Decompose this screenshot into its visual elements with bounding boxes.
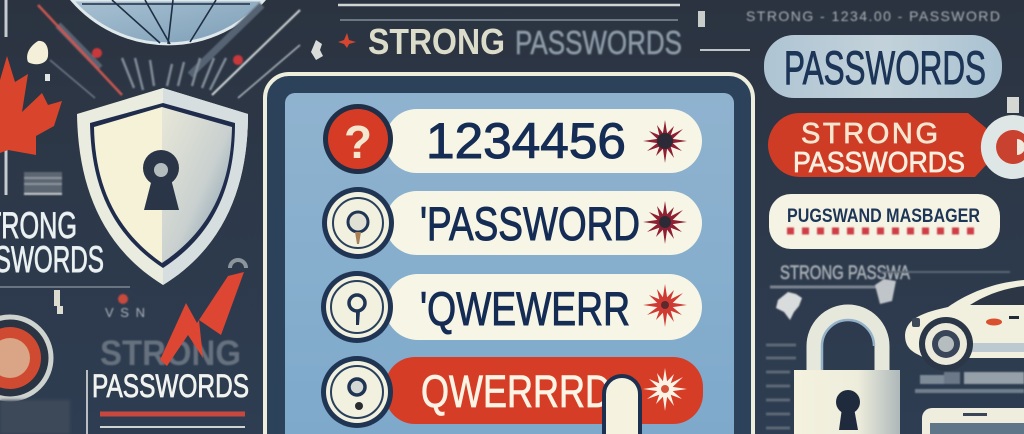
row 1: 123456: 1234456 (426, 113, 626, 169)
red badge bottom left (0, 287, 130, 434)
strong passwords red pill: STRONG (801, 118, 938, 150)
maple leaf (0, 0, 62, 195)
strong passwords red pill: PASSWORDS (793, 147, 965, 179)
strong passwords red pill (768, 113, 986, 179)
car (905, 280, 1024, 371)
lower left title (87, 334, 249, 434)
row 2: password (322, 187, 702, 259)
lock (794, 312, 900, 434)
top heading: PASSWORDS (515, 24, 682, 61)
lower left title: STRONG (100, 334, 241, 373)
burst (643, 201, 687, 244)
row 4: qwerrrd (321, 356, 703, 434)
main panel (265, 74, 753, 434)
cursor pointer (604, 376, 640, 434)
row 3: qwewerr: 'QWEWERR (420, 282, 630, 335)
faded subtitle: STRONG PASSWA (780, 263, 910, 284)
password manager pill (769, 194, 1000, 249)
faded subtitle (770, 263, 1010, 304)
stacked lines (766, 345, 796, 428)
top heading: STRONG (368, 21, 505, 62)
top right small text: STRONG - 1234.00 - PASSWORD (746, 8, 1000, 24)
top heading (311, 5, 750, 62)
row 3: qwewerr (321, 271, 702, 343)
row 4: qwerrrd: QWERRRD (421, 366, 611, 417)
burst (643, 368, 687, 411)
lightning bolt (160, 260, 246, 366)
row 1: 123456 (323, 104, 702, 174)
dial badge (981, 97, 1024, 179)
small white splat (776, 292, 802, 320)
shield (77, 88, 248, 285)
password manager pill: PUGSWAND MASBAGER (787, 206, 980, 227)
burst (643, 120, 687, 163)
small building icon (24, 172, 62, 194)
lower left title: PASSWORDS (92, 368, 249, 404)
row 1: 123456: ? (344, 116, 372, 168)
red marks (787, 228, 980, 234)
small icon row (105, 294, 145, 320)
faded strips (915, 372, 1024, 391)
burst (643, 284, 687, 327)
small icon row: VSN (105, 305, 145, 320)
globe (72, 0, 264, 44)
phone (922, 408, 1024, 434)
left heading: strong passwords (0, 205, 104, 280)
decorative radiating lines (38, 5, 300, 98)
row 2: password: 'PASSWORD (420, 197, 640, 250)
keyhole (143, 150, 179, 210)
